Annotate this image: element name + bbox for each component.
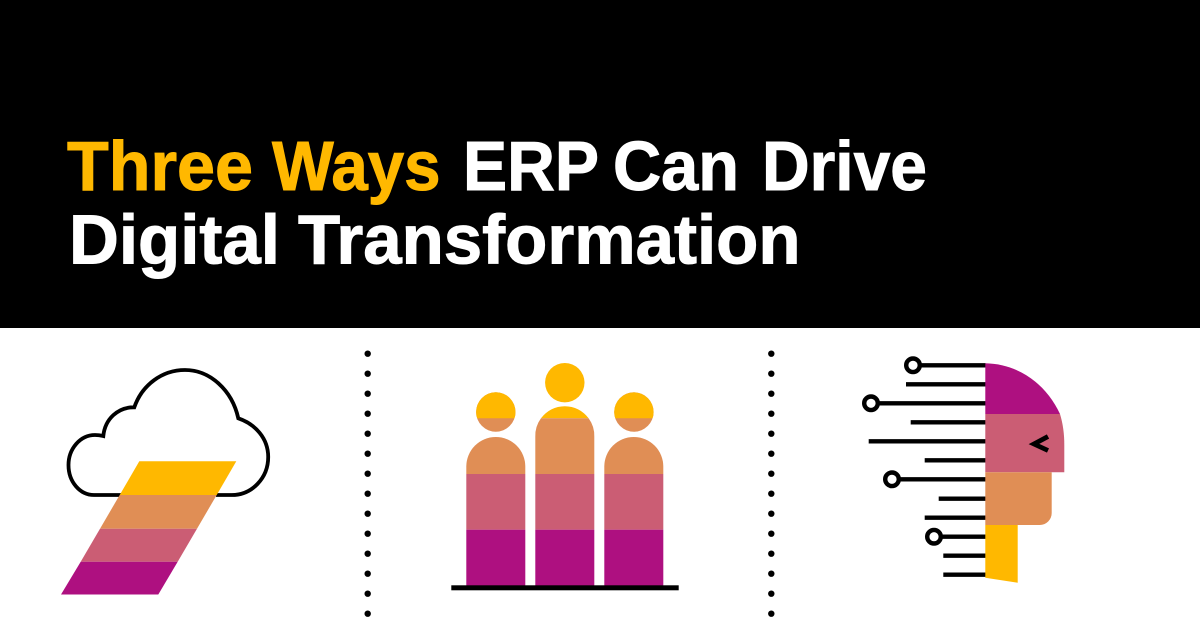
person: right	[604, 392, 663, 586]
person: centre	[535, 363, 594, 586]
heading: highlighted words	[67, 127, 440, 205]
stripe: yellow	[120, 461, 236, 495]
head: orange jaw	[985, 472, 1052, 525]
head: eye chevron	[1034, 436, 1048, 450]
stripe: pink	[81, 529, 197, 562]
heading: second line	[69, 200, 800, 278]
head: magenta crown	[985, 363, 1060, 414]
divider: right dotted line	[768, 350, 774, 617]
heading: highlighted words: Ways	[272, 127, 440, 205]
panel: black title banner	[0, 0, 1200, 328]
title	[67, 127, 927, 278]
person: left	[466, 392, 525, 586]
heading: second line: Transformation	[298, 200, 800, 278]
heading: rest of first line: Drive	[762, 127, 927, 205]
head: pink face band	[985, 414, 1064, 472]
heading: rest of first line	[463, 127, 927, 205]
circuit lines	[864, 358, 986, 575]
icon: digital head profile	[864, 358, 1064, 583]
stripe: magenta	[61, 562, 178, 594]
ground line	[451, 585, 679, 590]
heading: highlighted words: Three	[67, 127, 253, 205]
heading: rest of first line: Can	[613, 127, 739, 205]
heading: rest of first line: ERP	[463, 127, 599, 205]
icon: cloud with striped parallelogram	[61, 370, 268, 594]
icon: three people on a line	[451, 363, 679, 590]
stripe: orange	[100, 495, 217, 529]
head: yellow neck	[985, 525, 1018, 583]
cloud outline	[68, 370, 268, 495]
divider: left dotted line	[364, 350, 371, 617]
heading: second line: Digital	[69, 200, 280, 278]
